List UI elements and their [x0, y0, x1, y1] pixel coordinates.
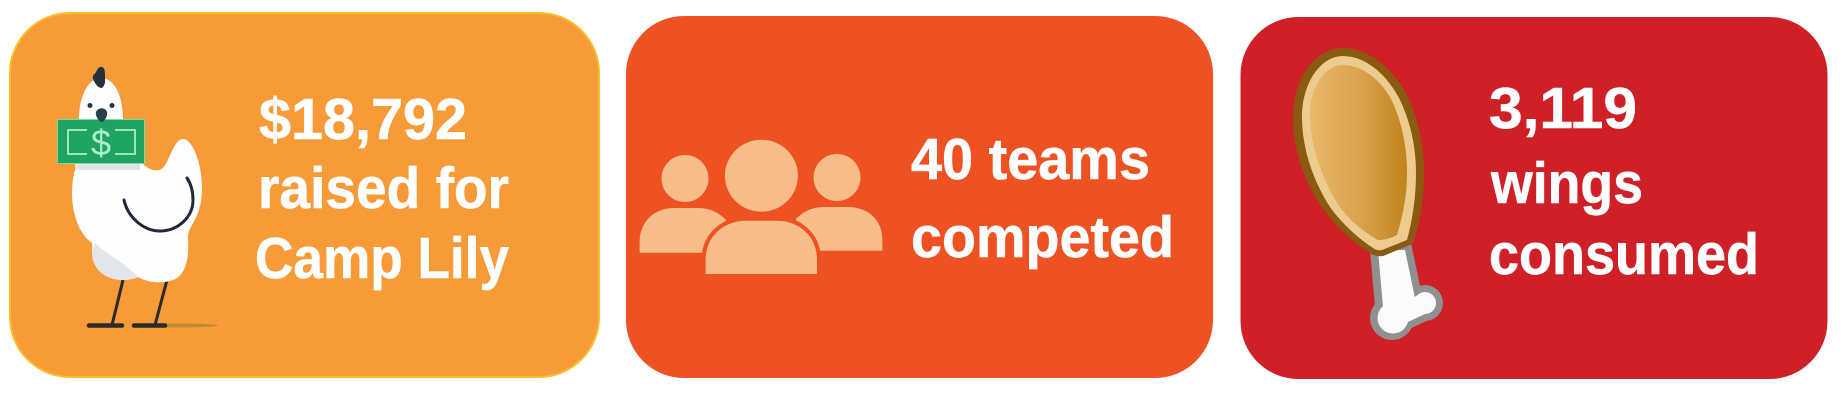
- panel: funds raised: [10, 13, 599, 377]
- text: 3,119 wings consumed: wings: [1490, 151, 1643, 216]
- text: 3,119 wings consumed: consumed: [1489, 222, 1759, 287]
- chicken shadow: [132, 324, 218, 328]
- right person: [796, 154, 882, 251]
- icon: group of three people: [640, 140, 882, 274]
- text: 3,119 wings consumed: [1489, 76, 1759, 287]
- icon: chicken holding a dollar bill: [58, 67, 218, 328]
- text: $18,792 raised for Camp Lily: $18,792: [259, 87, 467, 152]
- chicken beak: [96, 108, 107, 122]
- panel: teams: [626, 16, 1213, 378]
- chicken legs and feet: [89, 280, 167, 326]
- dollar bill: [58, 120, 144, 170]
- chicken wing line: [124, 178, 193, 231]
- chicken body: [72, 78, 202, 282]
- panel background: red-orange: [626, 16, 1213, 378]
- bone fill: [1378, 250, 1436, 334]
- panel background: orange: [10, 13, 599, 377]
- text: $18,792 raised for Camp Lily: Camp Lily: [255, 226, 509, 291]
- drumstick highlight band: [1302, 56, 1416, 250]
- text: 40 teams competed: [911, 127, 1174, 270]
- panel background: red: [1240, 17, 1828, 379]
- chicken comb: [93, 67, 105, 88]
- bone outline: [1370, 243, 1443, 340]
- text: 3,119 wings consumed: 3,119: [1489, 76, 1637, 141]
- left person: [640, 155, 726, 253]
- centre person: [706, 140, 817, 274]
- text: 40 teams competed: competed: [911, 205, 1174, 270]
- text: $18,792 raised for Camp Lily: [255, 87, 509, 291]
- text: $18,792 raised for Camp Lily: raised for: [258, 156, 509, 221]
- panel: wings: [1240, 17, 1828, 379]
- chicken belly shading: [92, 243, 138, 280]
- drumstick meat: [1310, 65, 1407, 240]
- drumstick outer edge: [1294, 49, 1423, 255]
- icon: chicken drumstick: [1294, 49, 1443, 340]
- dollar bill: $: [91, 122, 111, 163]
- text: 40 teams competed: 40 teams: [911, 127, 1150, 192]
- chicken eyes: [88, 103, 114, 108]
